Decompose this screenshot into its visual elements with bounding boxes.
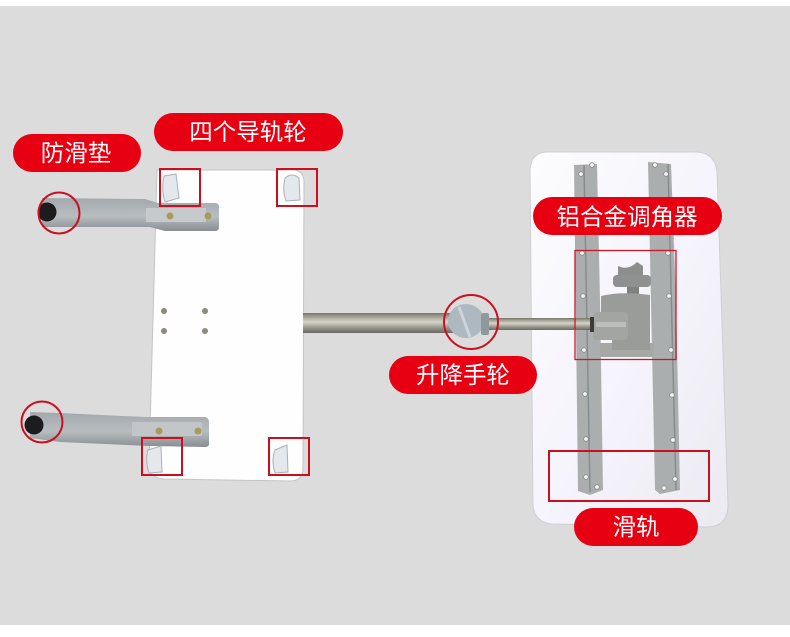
red marker: wheel box top left — [160, 169, 200, 206]
red marker: wheel box bottom right — [269, 438, 309, 475]
lifting hand wheel — [448, 304, 489, 338]
red marker: hand wheel circle — [444, 295, 498, 349]
panel: left board — [149, 170, 304, 481]
label: lifting hand wheel — [389, 356, 537, 394]
lower anti-slip arm — [24, 412, 209, 447]
guide wheels — [147, 174, 300, 473]
label: aluminium angle adjuster: 铝合金调角器 — [556, 204, 698, 230]
label: aluminium angle adjuster — [533, 197, 722, 235]
upper anti-slip arm — [38, 198, 219, 231]
red marker: anti-slip upper circle — [38, 192, 80, 234]
left rail — [574, 163, 603, 495]
label: slide rail: 滑轨 — [612, 514, 660, 540]
red marker: anti-slip lower circle — [22, 402, 62, 442]
label: four guide wheels — [154, 113, 343, 151]
lifting rod — [303, 313, 594, 333]
label: anti-slip pad: 防滑垫 — [41, 140, 111, 166]
label: lifting hand wheel: 升降手轮 — [416, 362, 510, 388]
label: four guide wheels: 四个导轨轮 — [189, 119, 307, 145]
red marker: rail box — [549, 451, 709, 501]
label: slide rail — [574, 508, 698, 546]
red marker: wheel box top right — [277, 169, 317, 206]
aluminium angle adjuster — [593, 262, 654, 357]
right rail — [648, 162, 680, 494]
label: anti-slip pad — [13, 134, 141, 172]
red marker: wheel box bottom left — [142, 438, 182, 475]
red marker: adjuster box — [575, 250, 676, 360]
panel: right board — [530, 152, 728, 527]
